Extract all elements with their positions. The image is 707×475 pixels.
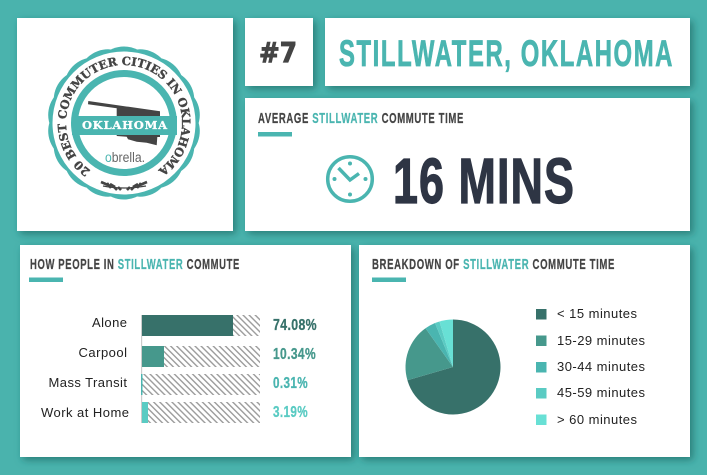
heading: AVERAGE STILLWATER COMMUTE TIME — [258, 110, 464, 127]
icon: Oklahoma state silhouette — [88, 101, 160, 145]
commute time value: 16 MINS — [393, 145, 575, 217]
legend: 45-59 minutes — [557, 385, 646, 400]
pie chart — [406, 320, 501, 414]
bar chart: Work at Home — [41, 405, 129, 420]
banner — [72, 116, 177, 135]
panel: commute time breakdown — [359, 245, 690, 457]
bar chart: 10.34% — [273, 346, 316, 363]
banner text: OKLAHOMA — [82, 118, 168, 132]
bar chart: Mass Transit — [48, 375, 127, 390]
bar chart: 74.08% — [273, 317, 317, 334]
obrella logo text: obrella. — [105, 150, 145, 165]
heading underline — [258, 132, 292, 136]
bar chart: 3.19% — [273, 404, 308, 421]
bar chart: 0.31% — [273, 375, 308, 392]
icon: laurel — [101, 182, 147, 190]
bar chart — [41, 315, 317, 423]
rank number: #7 — [259, 36, 297, 69]
legend: < 15 minutes — [557, 306, 638, 321]
bar chart: Carpool — [78, 345, 127, 360]
heading underline — [372, 278, 406, 282]
legend: > 60 minutes — [557, 412, 638, 427]
heading: HOW PEOPLE IN STILLWATER COMMUTE — [30, 256, 240, 273]
badge seal — [48, 46, 200, 200]
legend: 30-44 minutes — [557, 359, 646, 374]
panel: average commute time — [245, 98, 690, 231]
bar chart: Alone — [92, 315, 127, 330]
panel: how people commute — [20, 245, 351, 457]
circular badge text: 20 BEST COMMUTER CITIES IN OKLAHOMA — [57, 56, 191, 177]
legend — [536, 306, 646, 427]
legend: 15-29 minutes — [557, 333, 646, 348]
panel: city title — [325, 18, 690, 86]
heading: BREAKDOWN OF STILLWATER COMMUTE TIME — [372, 256, 615, 273]
heading underline — [29, 278, 63, 282]
icon: clock — [328, 157, 372, 201]
panel: rank — [245, 18, 313, 86]
panel: logo badge — [16, 17, 240, 238]
